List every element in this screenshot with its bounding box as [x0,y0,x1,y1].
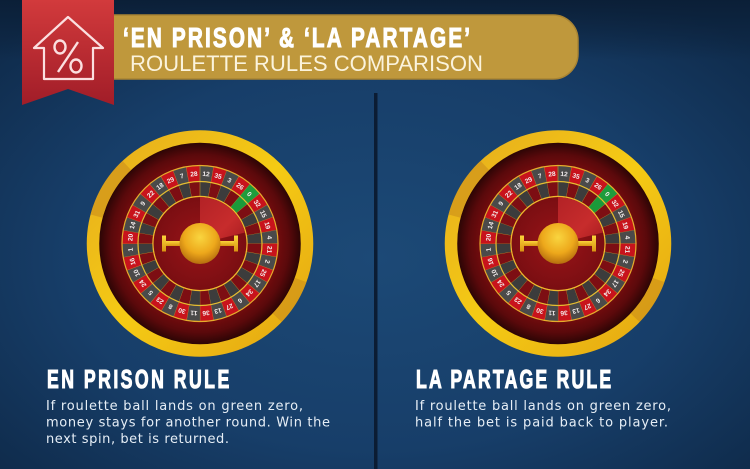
description: la partage [415,399,671,430]
pocket numbers: 14 [487,221,496,230]
pocket numbers: 27 [224,301,234,311]
pocket numbers: 9 [497,200,506,207]
pocket numbers: 19 [262,221,271,230]
title banner [110,15,578,79]
pocket numbers: 18 [513,182,524,192]
pocket numbers: 9 [139,200,148,207]
pocket numbers: 13 [571,306,580,315]
description: la partage: If roulette ball lands on green zero, [415,399,671,414]
pocket separators [138,181,262,306]
description: en prison [46,399,330,447]
pocket numbers: 11 [548,309,556,316]
pocket numbers: 29 [524,176,534,186]
spindle handle [520,236,596,252]
roulette wheel: la partage [451,136,665,350]
heading: la partage rule: LA PARTAGE RULE [416,365,611,394]
centre cone [512,197,604,290]
pocket numbers: 14 [129,221,138,230]
pocket numbers: 13 [213,306,222,315]
pocket numbers: 0 [245,191,253,199]
inner ring pockets [504,189,612,298]
banner bar [110,15,578,79]
heading line 1: ‘EN PRISON’ & ‘LA PARTAGE’ [123,23,470,54]
pocket numbers: 16 [129,257,138,266]
pocket numbers: 36 [202,309,210,316]
pocket numbers: 6 [236,296,243,304]
pocket numbers: 31 [491,209,500,219]
pocket numbers: 2 [263,259,271,264]
spindle handle [162,236,238,252]
pocket numbers: 12 [560,171,568,178]
ribbon [22,0,114,105]
pocket numbers: 28 [190,171,198,178]
pocket numbers: 35 [213,172,223,181]
pocket numbers: 4 [265,235,273,240]
pocket numbers: 7 [179,173,185,181]
pocket numbers: 15 [258,209,267,219]
spindle hub [180,223,220,264]
description: en prison: next spin, bet is returned. [46,432,229,447]
pocket numbers: 26 [593,182,603,192]
pocket numbers: 25 [258,268,267,278]
pocket numbers: 8 [167,302,174,310]
wheel body [452,138,664,350]
pocket numbers: 3 [584,177,591,185]
pocket numbers: 5 [147,288,155,296]
pocket numbers: 8 [525,302,532,310]
pocket numbers: 11 [190,309,198,316]
pocket numbers: 16 [487,257,496,266]
icon: house percent [34,17,103,79]
pocket numbers: 2 [621,259,629,264]
pocket numbers: 34 [602,287,612,298]
spindle hub [538,223,578,264]
gold rim [451,136,665,350]
pocket numbers: 21 [623,246,631,254]
pocket numbers: 1 [485,247,493,252]
pocket numbers: 22 [504,189,514,200]
pocket numbers: 19 [620,221,629,230]
pocket numbers: 22 [146,189,156,200]
pocket numbers: 6 [594,296,601,304]
pocket numbers: 32 [610,199,620,209]
pocket numbers: 17 [609,278,620,288]
pocket numbers: 27 [582,301,592,311]
pocket separators [496,181,620,306]
pocket numbers: 1 [127,247,135,252]
centre cone [154,197,246,290]
pocket numbers: 32 [252,199,262,209]
pocket numbers: 10 [491,268,500,278]
heading: en prison rule: EN PRISON RULE [47,365,229,394]
gold rim [93,136,307,350]
pocket numbers: 7 [537,173,543,181]
number ring pockets [488,174,628,314]
pocket numbers: 25 [616,268,625,278]
pocket numbers: 28 [548,171,556,178]
panel: en prison rule text [46,365,330,447]
pocket numbers: 17 [251,278,262,288]
centre divider [374,93,378,469]
pocket numbers: 15 [616,209,625,219]
pocket numbers: 12 [202,171,210,178]
pocket numbers: 10 [133,268,142,278]
pocket numbers: 18 [155,182,166,192]
pocket numbers: 23 [513,295,523,305]
pocket numbers [127,171,273,316]
pocket numbers: 30 [535,306,545,315]
pocket numbers: 21 [265,246,273,254]
number ring pockets [130,174,270,314]
pocket numbers: 0 [603,191,611,199]
inner ring pockets [146,189,254,298]
pocket numbers: 5 [505,288,513,296]
pocket numbers: 31 [133,209,142,219]
roulette wheel: en prison [93,136,307,350]
pocket numbers: 23 [155,295,165,305]
pocket numbers: 20 [485,233,493,241]
pocket numbers: 20 [127,233,135,241]
pocket numbers: 24 [138,278,148,288]
pocket numbers: 3 [226,177,233,185]
description: en prison: money stays for another round. Win the [46,416,330,430]
description: en prison: If roulette ball lands on green zero, [46,399,303,414]
heading line 2: ROULETTE RULES COMPARISON [130,51,483,76]
pocket numbers: 29 [166,176,176,186]
pocket numbers: 30 [177,306,187,315]
pocket numbers [485,171,631,316]
description: la partage: half the bet is paid back to player. [415,416,668,430]
pocket numbers: 36 [560,309,568,316]
wheel body [94,138,306,350]
pocket numbers: 4 [623,235,631,240]
pocket numbers: 34 [244,287,254,298]
pocket numbers: 35 [571,172,581,181]
pocket numbers: 24 [496,278,506,288]
panel: la partage rule text [415,365,671,430]
red ribbon with house icon [22,0,114,105]
pocket numbers: 26 [235,182,245,192]
